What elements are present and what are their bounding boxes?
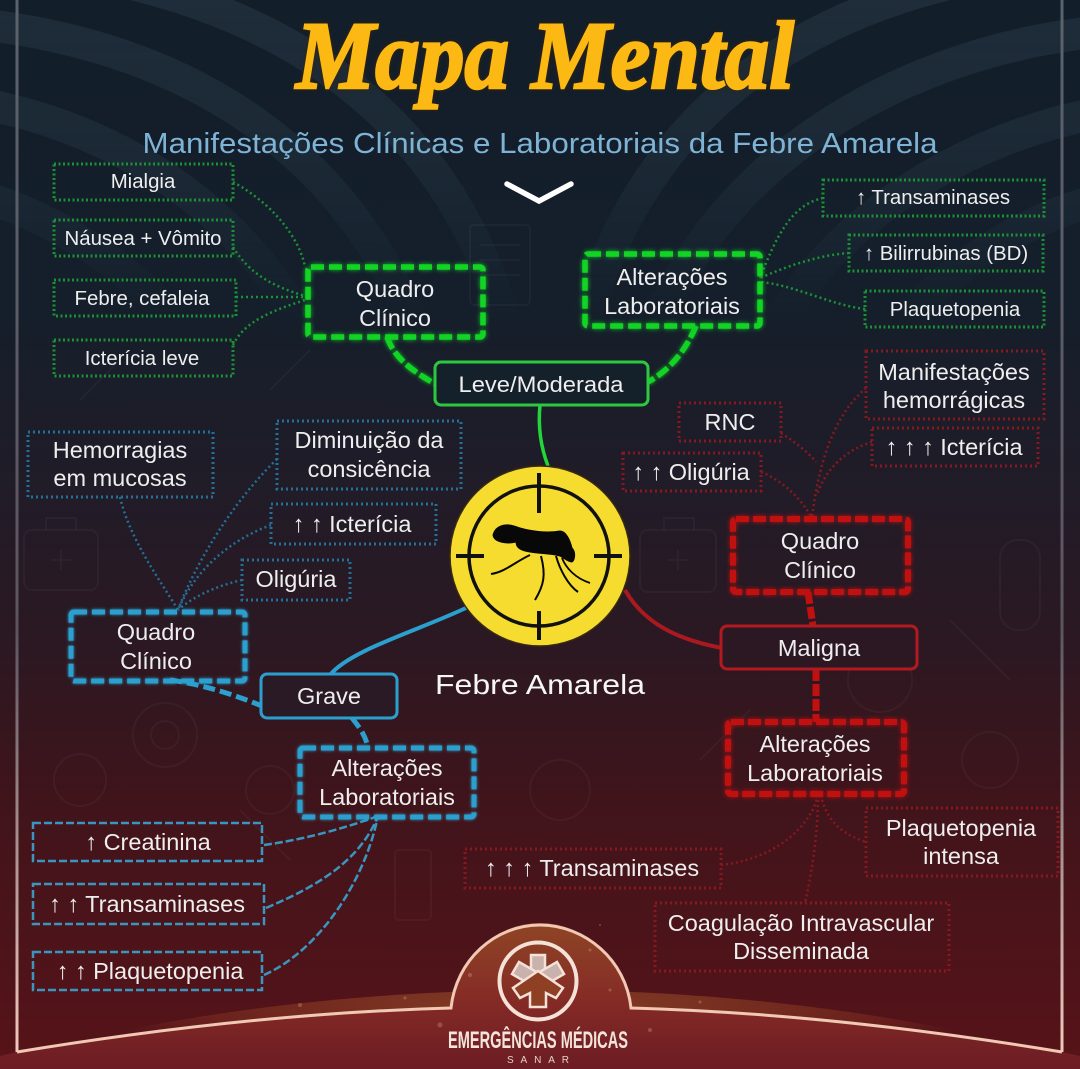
icon: chevron [507, 184, 571, 201]
box: Leve/Moderada [435, 362, 648, 405]
Diminuição da consciência [277, 421, 461, 489]
footer banner [0, 923, 1080, 1069]
Plaquetopenia intensa: intensa [923, 843, 1000, 869]
Creatinina: ↑ Creatinina [85, 829, 212, 855]
Transaminases green: ↑ Transaminases [856, 187, 1010, 209]
text: Alterações Laboratoriais green: Alterações [616, 264, 728, 290]
connectors: green branch [233, 182, 865, 466]
Oligúria red: ↑ ↑ Oligúria [632, 459, 751, 485]
text: Quadro Clínico green: Clínico [359, 305, 431, 331]
Coagulação Intravascular Disseminada: Coagulação Intravascular [668, 910, 934, 936]
Manifestações hemorrágicas: hemorrágicas [883, 387, 1025, 413]
Transaminases green [823, 180, 1044, 216]
Oligúria blue: Oligúria [256, 566, 337, 592]
Transaminases blue [33, 884, 264, 924]
Manifestações hemorrágicas [866, 351, 1044, 419]
Plaquetopenia blue: ↑ ↑ Plaquetopenia [57, 958, 244, 984]
icon: mosquito [491, 525, 590, 600]
Bilirrubinas [849, 235, 1043, 271]
Hemorragias em mucosas: em mucosas [53, 465, 187, 491]
Icterícia red: ↑ ↑ ↑ Icterícia [885, 434, 1023, 460]
box: Grave [261, 674, 397, 718]
box: Alterações Laboratoriais red [728, 722, 904, 794]
Diminuição da consciência: Diminuição da [295, 427, 443, 453]
Creatinina [33, 823, 262, 861]
footer shape [0, 923, 1080, 1069]
text: Quadro Clínico blue: Quadro [117, 619, 195, 645]
panel: maligna [465, 351, 1058, 971]
Plaquetopenia intensa [866, 808, 1058, 876]
label: Leve/Moderada: Leve/Moderada [458, 372, 624, 397]
Bilirrubinas: ↑ Bilirrubinas (BD) [864, 243, 1028, 265]
Febre, cefaleia: Febre, cefaleia [75, 288, 210, 310]
text: Quadro Clínico red: Clínico [784, 557, 856, 583]
logo subtext: SANAR [507, 1055, 569, 1066]
box: Quadro Clínico green [308, 267, 483, 337]
text: Alterações Laboratoriais green: Laboratoriais [604, 293, 740, 319]
Transaminases red [465, 849, 721, 888]
logo: medical star [500, 942, 576, 1020]
footer outline [17, 925, 1062, 1052]
Oligúria red [623, 453, 761, 491]
Icterícia blue [271, 504, 436, 544]
panel: grave [28, 421, 474, 990]
label: Febre Amarela: Febre Amarela [435, 669, 645, 700]
text: Quadro Clínico red: Quadro [781, 528, 859, 554]
Icterícia leve: Icterícia leve [85, 348, 199, 370]
Icterícia blue: ↑ ↑ Icterícia [293, 511, 412, 537]
Mialgia [54, 164, 233, 200]
Oligúria blue [242, 560, 350, 600]
Febre, cefaleia [54, 280, 236, 316]
Hemorragias em mucosas: Hemorragias [53, 437, 187, 463]
Diminuição da consciência: consicência [308, 456, 431, 482]
Transaminases red: ↑ ↑ ↑ Transaminases [485, 855, 699, 881]
text: Alterações Laboratoriais red: Alterações [759, 731, 871, 757]
Plaquetopenia intensa: Plaquetopenia [886, 815, 1036, 841]
Coagulação Intravascular Disseminada [655, 903, 949, 971]
label: Maligna: Maligna [778, 635, 861, 661]
label: Grave: Grave [297, 683, 361, 709]
Icterícia leve [54, 340, 233, 376]
Plaquetopenia green: Plaquetopenia [890, 299, 1021, 321]
title: Mapa Mental [294, 2, 794, 109]
Icterícia red [872, 428, 1038, 466]
logo text: EMERGÊNCIAS MÉDICAS [448, 1026, 628, 1054]
subtitle: Manifestações Clínicas e Laboratoriais da Febre Amarela [142, 128, 938, 160]
Náusea + Vômito: Náusea + Vômito [65, 228, 221, 250]
Coagulação Intravascular Disseminada: Disseminada [733, 938, 870, 964]
Plaquetopenia green [865, 291, 1044, 327]
box: Alterações Laboratoriais green [585, 254, 760, 326]
text: Quadro Clínico green: Quadro [356, 276, 434, 302]
panel: leve/moderada [54, 164, 1044, 405]
Plaquetopenia blue [33, 952, 262, 990]
box: Quadro Clínico red [733, 519, 908, 592]
text: Alterações Laboratoriais red: Laboratoriais [747, 760, 883, 786]
connectors: blue branch [120, 459, 468, 975]
box: Maligna [721, 626, 917, 669]
text: Alterações Laboratoriais blue: Alterações [331, 755, 443, 781]
Transaminases blue: ↑ ↑ Transaminases [49, 891, 245, 917]
background medical icons [24, 225, 1040, 920]
Hemorragias em mucosas [28, 432, 213, 497]
RNC [679, 403, 781, 441]
box: Alterações Laboratoriais blue [300, 748, 474, 817]
Manifestações hemorrágicas: Manifestações [878, 359, 1030, 385]
Mialgia: Mialgia [111, 171, 176, 193]
Náusea + Vômito [54, 220, 233, 256]
RNC: RNC [705, 409, 755, 435]
center icon: mosquito target [450, 466, 630, 646]
text: Alterações Laboratoriais blue: Laboratoriais [319, 784, 455, 810]
footer speckles [298, 924, 702, 1032]
background stripes [0, 0, 1080, 202]
box: Quadro Clínico blue [71, 612, 245, 681]
connectors: red branch [625, 388, 872, 903]
text: Quadro Clínico blue: Clínico [120, 648, 192, 674]
footer glow band [60, 992, 1020, 1045]
